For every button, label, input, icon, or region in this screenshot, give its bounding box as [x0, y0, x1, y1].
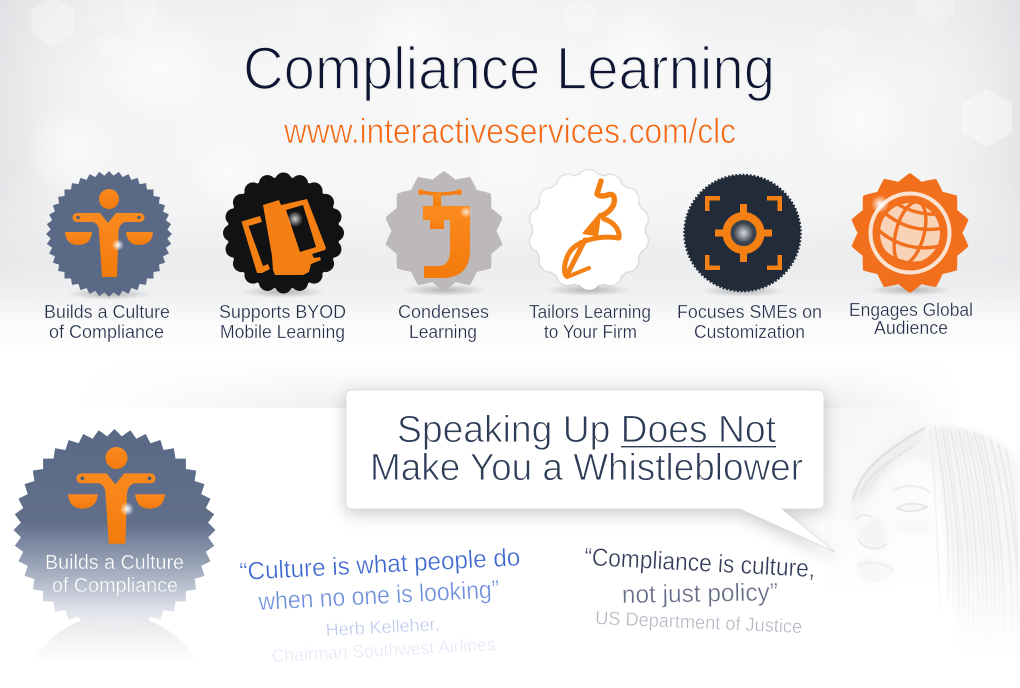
pencil hair and features	[852, 427, 1018, 604]
label: tailors learning: to Your Firm	[544, 322, 637, 342]
callout: speaking up	[346, 390, 835, 552]
badge text: Builds a Culture	[45, 552, 184, 574]
badge shape: navy fine-toothed	[684, 175, 800, 291]
reflection	[30, 615, 200, 665]
speech bubble	[346, 390, 835, 552]
label: supports byod: Supports BYOD	[219, 302, 346, 322]
quote: herb kelleher: Chairman Southwest Airlines	[271, 634, 496, 666]
badge: engages global audience	[849, 173, 971, 296]
quote: us department of justice: US Department of Justice	[595, 608, 803, 638]
label: supports byod	[219, 302, 346, 342]
label: builds a culture: Builds a Culture	[44, 302, 170, 322]
icon: hand holding tablet	[242, 199, 326, 275]
icon: scales figure	[65, 189, 153, 277]
label: builds a culture	[44, 302, 170, 342]
quote: us department of justice	[584, 543, 816, 638]
callout text: Speaking Up Does Not	[397, 409, 776, 451]
badge shape: serrated slate	[46, 171, 172, 297]
large badge: builds a culture of compliance	[14, 429, 216, 648]
label: engages global: Engages Global	[849, 300, 973, 320]
label: tailors learning	[529, 302, 651, 342]
title: Compliance Learning	[243, 35, 775, 102]
icon: globe	[870, 194, 950, 272]
icon: target crosshair	[705, 196, 782, 270]
icon: needle and thread	[564, 181, 619, 277]
label: tailors learning: Tailors Learning	[529, 302, 651, 322]
illustration: sketched woman's face	[852, 426, 1019, 618]
soft tonal shading	[856, 430, 1018, 560]
label: focuses smes: Customization	[694, 322, 805, 342]
callout: speaking up: Make You a Whistleblower	[370, 447, 803, 489]
quote: herb kelleher: Herb Kelleher,	[325, 614, 440, 640]
label: focuses smes: Focuses SMEs on	[677, 302, 822, 322]
badge shape: white scalloped	[528, 170, 650, 290]
badge: condenses learning	[383, 171, 505, 296]
label: focuses smes	[677, 302, 822, 342]
badge shape	[14, 429, 216, 620]
badge: tailors learning	[528, 170, 650, 296]
badge shape: grey star	[383, 171, 505, 291]
background	[0, 0, 1020, 444]
badge shape: black scalloped	[223, 172, 344, 294]
url: www.interactiveservices.com/clc	[283, 112, 736, 151]
icon: scales figure	[68, 447, 165, 544]
badge: focuses smes	[684, 175, 800, 297]
quote: herb kelleher	[239, 543, 521, 666]
quote: us department of justice: “Compliance is culture,	[584, 543, 816, 583]
icon: clamp	[418, 189, 470, 278]
quote: us department of justice: not just policy”	[622, 578, 778, 609]
label: supports byod: Mobile Learning	[220, 322, 345, 342]
badge shape: orange star	[849, 173, 971, 293]
label: condenses learning: Condenses	[398, 302, 489, 322]
quote: herb kelleher: when no one is looking”	[257, 575, 500, 616]
large badge: builds a culture of compliance: of Compliance	[52, 575, 178, 597]
badge: supports byod	[223, 172, 344, 298]
quote: herb kelleher: “Culture is what people do	[239, 543, 521, 586]
label: engages global: Audience	[874, 318, 948, 338]
badge: builds a culture of compliance	[46, 171, 172, 300]
label: builds a culture: of Compliance	[49, 322, 164, 342]
label: condenses learning: Learning	[409, 322, 477, 342]
label: condenses learning	[398, 302, 489, 342]
label: engages global	[849, 300, 973, 338]
